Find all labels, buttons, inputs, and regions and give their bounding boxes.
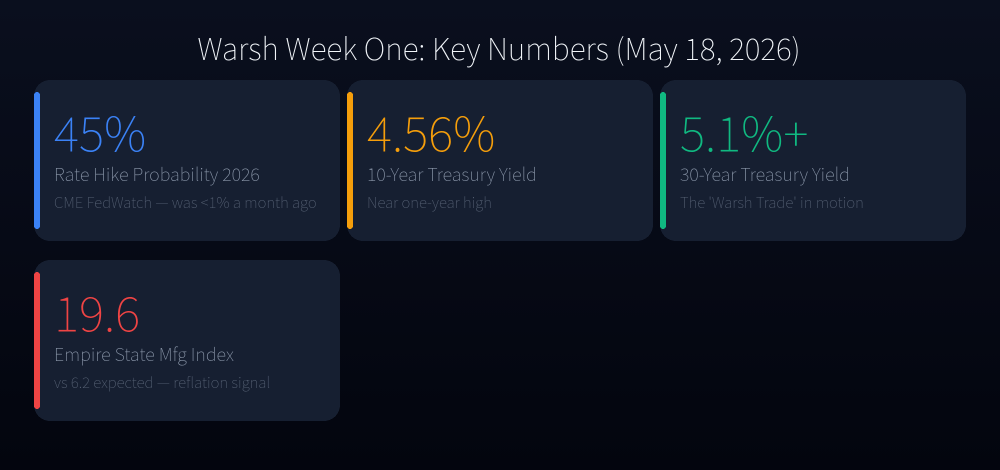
label: 10-year treasury yield: 10-Year Treasury Yield xyxy=(367,161,537,187)
label: empire state mfg index: Empire State Mfg Index xyxy=(54,341,234,367)
panel: 10-year treasury yield xyxy=(347,80,653,241)
label: rate hike probability: Rate Hike Probability 2026 xyxy=(54,161,260,187)
big number: 4.56%: 4.56% xyxy=(367,96,495,166)
accent bar: red xyxy=(34,272,40,409)
big number: 45%: 45% xyxy=(54,96,146,166)
panel: empire state manufacturing index xyxy=(34,260,340,421)
label: 30-year treasury yield: 30-Year Treasury Yield xyxy=(680,161,850,187)
note: CME FedWatch: CME FedWatch — was <1% a month ago xyxy=(54,192,317,213)
note: reflation signal: vs 6.2 expected — reflation signal xyxy=(54,372,270,393)
big number: 19.6: 19.6 xyxy=(54,276,140,346)
accent bar: amber xyxy=(347,92,353,229)
note: near one-year high: Near one-year high xyxy=(367,192,492,213)
big number: 5.1%+: 5.1%+ xyxy=(680,96,808,166)
panel: rate hike probability xyxy=(34,80,340,241)
panel: 30-year treasury yield xyxy=(660,80,966,241)
accent bar: blue xyxy=(34,92,40,229)
title: Warsh Week One: Key Numbers (May 18, 2026) xyxy=(197,25,801,69)
note: Warsh Trade: The 'Warsh Trade' in motion xyxy=(680,192,864,213)
accent bar: green xyxy=(660,92,666,229)
